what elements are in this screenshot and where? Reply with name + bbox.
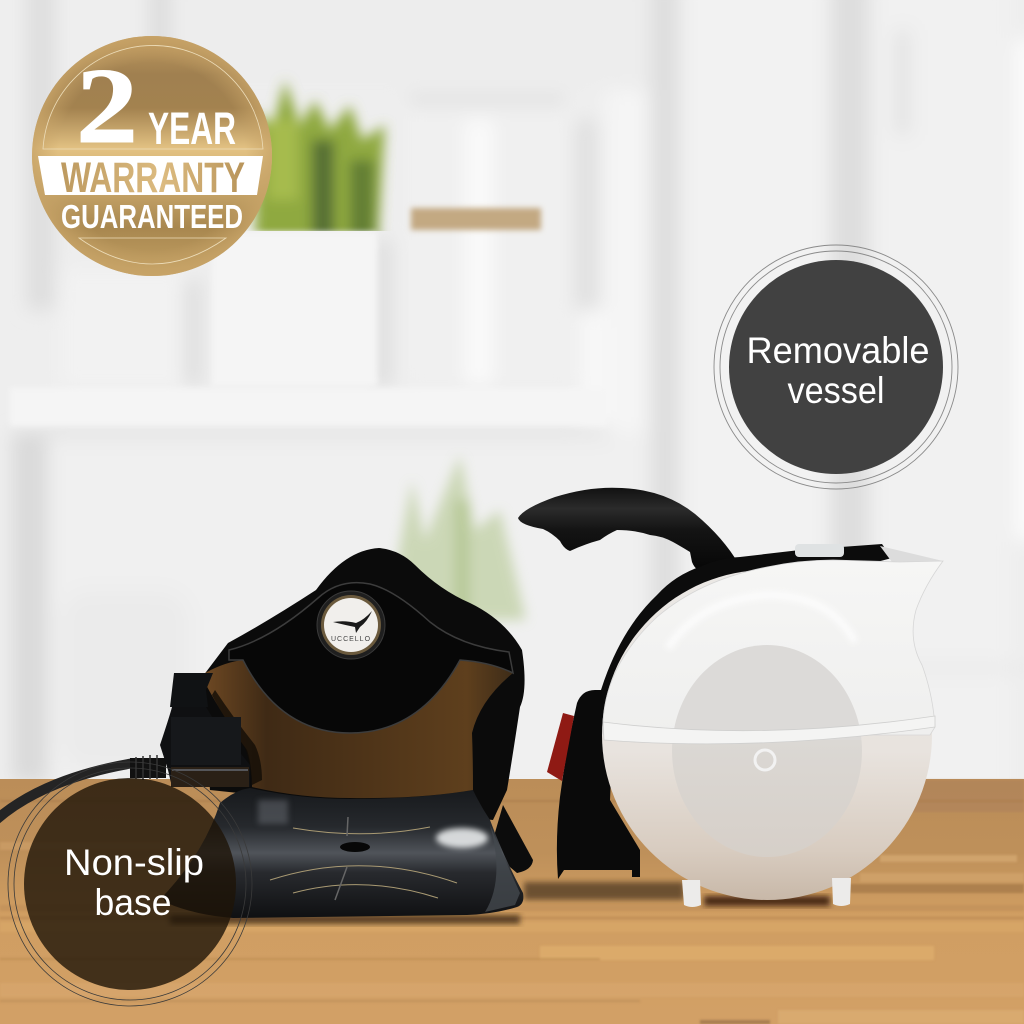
kettle bbox=[518, 488, 943, 907]
plug block bbox=[160, 673, 250, 787]
blurred canister band bbox=[411, 208, 541, 230]
base reflection bbox=[258, 800, 288, 824]
guaranteed label: GUARANTEED bbox=[61, 198, 243, 235]
warranty label: WARRANTY bbox=[61, 154, 245, 202]
callout text: base bbox=[94, 882, 172, 923]
ring clasp bbox=[755, 750, 775, 770]
red power switch bbox=[547, 713, 574, 781]
lid button bbox=[795, 544, 844, 557]
top arc line bbox=[43, 45, 263, 149]
base glossy upper panel bbox=[229, 583, 513, 733]
numeral 2: 2 bbox=[76, 47, 138, 166]
kettle rear black shell bbox=[601, 544, 892, 730]
blurred small plant bbox=[390, 455, 526, 620]
callout text: Removable bbox=[746, 330, 930, 371]
power cord and strain relief bbox=[0, 755, 166, 820]
badge disc bbox=[32, 36, 272, 276]
icon: bird logo bbox=[333, 611, 372, 633]
callout text: vessel bbox=[788, 370, 884, 411]
callout: removable vessel bbox=[714, 245, 958, 489]
white ribbon bbox=[38, 156, 263, 195]
base plate shadow bbox=[212, 690, 262, 785]
spout inner rim bbox=[880, 546, 943, 566]
white plant pot bbox=[212, 232, 377, 386]
kettle base: black docking station bbox=[160, 548, 533, 918]
inner window bbox=[672, 645, 862, 857]
base lower foot bbox=[164, 788, 523, 918]
callout text: Non-slip bbox=[64, 842, 204, 883]
wooden tabletop bbox=[0, 779, 1024, 1024]
warranty badge bbox=[32, 36, 272, 276]
badge rim tone bbox=[32, 36, 272, 276]
callout disc bbox=[24, 778, 236, 990]
dome highlight bbox=[668, 595, 855, 648]
horizontal band bbox=[603, 716, 935, 744]
base highlight bbox=[436, 828, 488, 848]
year label: YEAR bbox=[148, 103, 236, 154]
left foot bbox=[682, 880, 701, 907]
blurred potted plant bbox=[255, 80, 385, 240]
blurred kitchen background bbox=[0, 0, 1024, 800]
brand name: UCCELLO bbox=[331, 636, 371, 643]
callout: non-slip base bbox=[8, 762, 252, 1006]
base gold seam lines bbox=[270, 817, 457, 900]
callout rings bbox=[714, 245, 958, 489]
kettle lower body bbox=[602, 570, 932, 900]
base rear leg bbox=[490, 805, 533, 873]
right foot bbox=[832, 878, 851, 906]
kettle upper body with spout bbox=[603, 560, 943, 735]
callout disc bbox=[729, 260, 943, 474]
base center mark bbox=[340, 842, 370, 852]
base right edge sheen bbox=[485, 825, 520, 912]
handle bbox=[518, 488, 735, 572]
bottom arc line bbox=[79, 238, 226, 264]
base back shell bbox=[200, 548, 525, 820]
brand badge bbox=[317, 591, 385, 659]
base front plate reflecting wood bbox=[205, 660, 513, 798]
callout rings bbox=[8, 762, 252, 1006]
kettle docking rear block bbox=[557, 690, 640, 879]
